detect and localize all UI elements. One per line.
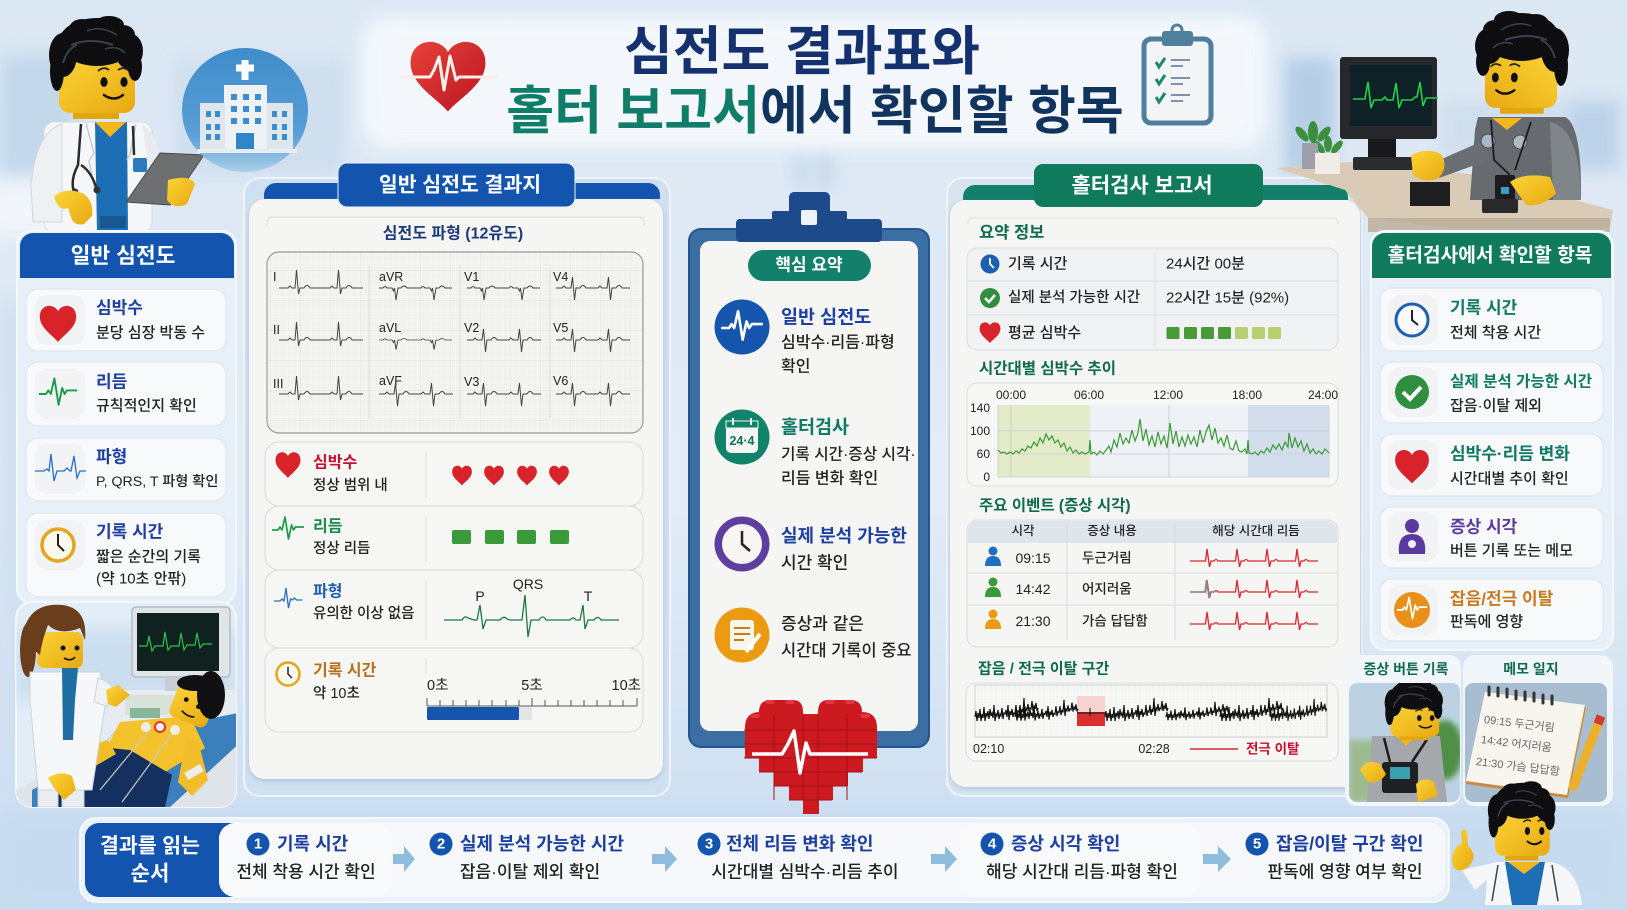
strip heading: order of reading results: 순서 <box>131 862 169 886</box>
heading: key events: 주요 이벤트 (증상 시각) <box>979 496 1131 514</box>
table: key events: 해당 시간대 리듬 <box>1212 524 1300 538</box>
panel: key summary clipboard <box>689 192 929 747</box>
card: symptom time: 버튼 기록 또는 메모 <box>1450 542 1573 560</box>
card: recording time <box>26 513 226 597</box>
row: recording time ruler: 0초 <box>427 678 448 694</box>
step 4: 증상 시각 확인 <box>1011 834 1120 854</box>
panel heading: items to check in holter: 홀터검사에서 확인할 항목 <box>1388 244 1592 266</box>
event row: 09:15 palpitation: 09:15 <box>1015 550 1051 566</box>
illustration: memo notebook with pencil: 14:42 어지러움 <box>1480 733 1552 755</box>
icon: hospital in blue circle <box>182 48 308 172</box>
step 1: 기록 시간 <box>277 834 349 854</box>
illustration: memo notebook with pencil: 21:30 가슴 답답함 <box>1475 755 1560 778</box>
tab heading: general ECG result sheet <box>338 163 575 207</box>
step 5: 판독에 영향 여부 확인 <box>1268 862 1422 882</box>
row: heart rate normal: 정상 범위 내 <box>313 477 388 494</box>
table: summary info: 실제 분석 가능한 시간 <box>1008 289 1140 306</box>
illustration: nurse, monitor and patient with electrodes <box>16 602 243 807</box>
summary item: holter test: 홀터검사 <box>781 416 849 438</box>
chart: hourly heart rate line: 00:00 <box>996 388 1026 402</box>
card: waveform: P, QRS, T 파형 확인 <box>96 474 218 490</box>
chart: noise strip: 02:10 <box>973 742 1004 756</box>
row: rhythm normal: 정상 리듬 <box>313 540 370 557</box>
step 2: 2 <box>437 836 445 852</box>
step 2 <box>430 832 624 882</box>
table: summary info <box>967 248 1338 350</box>
chart: hourly heart rate line: 18:00 <box>1232 388 1262 402</box>
tab heading: holter report: 홀터검사 보고서 <box>1071 174 1213 198</box>
chart: hourly heart rate line <box>967 383 1338 486</box>
chart: hourly heart rate line: 12:00 <box>1153 388 1183 402</box>
panel heading: items to check in holter <box>1372 233 1611 278</box>
event row: 14:42 dizziness <box>985 578 1318 598</box>
row: recording time ruler <box>265 648 643 732</box>
step 2: 실제 분석 가능한 시간 <box>460 834 624 854</box>
table: summary info: 24시간 00분 <box>1166 256 1245 272</box>
card: symptom time <box>1380 507 1603 568</box>
row: heart rate normal: 심박수 <box>313 454 357 472</box>
card: noise and lead-off: 잡음/전극 이탈 <box>1450 590 1554 608</box>
strip heading: order of reading results: 결과를 읽는 <box>100 834 200 858</box>
summary item: holter test <box>714 410 916 488</box>
icon: heart with ECG line <box>400 42 497 111</box>
panel: symptom button and memo diary <box>1345 655 1613 806</box>
summary item: same-time record: 증상과 같은 <box>781 614 864 634</box>
illustration: memo notebook with pencil: 09:15 두근거림 <box>1483 713 1555 735</box>
chart: 12-lead ECG traces: II <box>273 323 280 337</box>
chart: 12-lead ECG traces: V6 <box>553 374 568 388</box>
chart: 12-lead ECG traces: aVR <box>379 270 403 284</box>
chart: hourly heart rate line: 24:00 <box>1308 388 1338 402</box>
summary item: analyzable time: 실제 분석 가능한 <box>781 526 907 546</box>
summary item: holter test: 기록 시간·증상 시각· <box>781 446 916 464</box>
row: waveform with P QRS T: 유의한 이상 없음 <box>313 605 414 622</box>
card: waveform: 파형 <box>96 448 127 466</box>
tab heading: holter report <box>1034 164 1263 207</box>
card: noise and lead-off: 판독에 영향 <box>1450 614 1523 630</box>
event row: 14:42 dizziness: 어지러움 <box>1082 582 1132 596</box>
chart: 12-lead ECG traces: aVF <box>379 374 402 388</box>
step 1: 전체 착용 시간 확인 <box>236 862 376 882</box>
row: waveform with P QRS T: QRS <box>513 576 543 592</box>
chart: 12-lead ECG traces: V1 <box>464 270 479 284</box>
reading order strip <box>80 818 1449 902</box>
step 5: 잡음/이탈 구간 확인 <box>1276 834 1423 854</box>
summary item: holter test: 24·4 <box>729 434 755 448</box>
heading: summary info: 요약 정보 <box>979 223 1044 242</box>
chart: 12-lead ECG traces: V3 <box>464 375 479 389</box>
step 4 <box>960 823 1199 897</box>
step 1 <box>219 823 391 897</box>
title panel <box>362 16 1267 148</box>
panel: general ECG result sheet <box>244 163 670 796</box>
pill heading: key summary: 핵심 요약 <box>775 256 843 274</box>
summary item: general ECG: 일반 심전도 <box>781 306 871 328</box>
row: recording time ruler: 기록 시간 <box>313 662 377 680</box>
card: analyzable time <box>1380 362 1603 423</box>
event row: 09:15 palpitation <box>985 546 1318 567</box>
card: symptom time: 증상 시각 <box>1450 518 1518 536</box>
panel heading: general ECG: 일반 심전도 <box>71 244 175 268</box>
card: recording time: 기록 시간 <box>96 522 164 542</box>
pill heading: key summary <box>748 250 871 281</box>
chart: 12-lead ECG traces: V2 <box>464 321 479 335</box>
lego doctor top-left with tablet <box>31 16 204 232</box>
illustration: lego man with holter device <box>1349 679 1463 802</box>
step 3: 시간대별 심박수·리듬 추이 <box>711 862 899 882</box>
step 3: 3 <box>705 836 713 852</box>
row: waveform with P QRS T <box>265 570 643 648</box>
summary item: general ECG: 심박수·리듬·파형 <box>781 334 895 352</box>
arrow 2 <box>652 846 677 872</box>
chart: 12-lead ECG traces: V4 <box>553 270 568 284</box>
lego doctor bottom-right pointing up <box>1452 781 1582 905</box>
title text <box>506 22 1124 141</box>
step 2: 잡음·이탈 제외 확인 <box>460 862 600 882</box>
step 5 <box>1246 832 1423 882</box>
event row: 21:30 chest tightness: 가슴 답답함 <box>1082 614 1148 628</box>
row: waveform with P QRS T: P <box>475 588 485 604</box>
row: recording time ruler: 5초 <box>521 678 543 694</box>
summary item: general ECG: 확인 <box>781 358 810 376</box>
chart: 12-lead ECG traces <box>267 252 643 433</box>
card: waveform <box>26 438 226 501</box>
table: summary info: 기록 시간 <box>1008 256 1068 272</box>
summary item: general ECG <box>714 300 895 376</box>
strip heading: order of reading results <box>85 823 245 897</box>
card: recording time: 짧은 순간의 기록 <box>96 548 201 566</box>
summary item: holter test: 리듬 변화 확인 <box>781 470 878 488</box>
chart: hourly heart rate line: 60 <box>977 447 990 461</box>
heading: hourly heart rate trend: 시간대별 심박수 추이 <box>979 360 1116 378</box>
card: heart rate: 분당 심장 박동 수 <box>96 324 205 342</box>
heading: noise and lead-off interval: 잡음 / 전극 이탈 구간 <box>978 660 1109 678</box>
table: summary info: 22시간 15분 (92%) <box>1166 290 1289 306</box>
row: heart rate normal <box>265 442 643 506</box>
card: noise and lead-off <box>1380 579 1603 641</box>
summary item: same-time record <box>714 608 912 662</box>
summary item: analyzable time: 시간 확인 <box>781 554 848 572</box>
card: analyzable time: 잡음·이탈 제외 <box>1450 398 1542 414</box>
chart: hourly heart rate line: 06:00 <box>1074 388 1104 402</box>
card: recording time <box>1380 288 1603 351</box>
clipboard clip <box>736 192 882 242</box>
chart: hourly heart rate line: 100 <box>970 424 990 438</box>
chart: 12-lead ECG traces: aVL <box>379 321 401 335</box>
card: recording time: (약 10초 안팎) <box>96 570 186 588</box>
label: symptom button record: 증상 버튼 기록 <box>1363 661 1449 677</box>
title text: 심전도 결과표와 <box>624 22 980 82</box>
icon: lego brick heart <box>744 700 877 814</box>
icon: clipboard checklist <box>1144 25 1211 123</box>
chart: hourly heart rate line: 0 <box>983 470 990 484</box>
chart: 12-lead ECG traces: I <box>273 270 276 284</box>
event row: 21:30 chest tightness: 21:30 <box>1015 613 1051 629</box>
table: key events <box>967 520 1338 647</box>
row: rhythm normal <box>265 506 643 570</box>
arrow 3 <box>931 846 957 872</box>
lego technician at desk with monitor <box>1276 11 1613 232</box>
card: recording time: 전체 착용 시간 <box>1450 324 1541 342</box>
table: key events: 증상 내용 <box>1087 524 1137 538</box>
card: heart rate and rhythm change: 심박수·리듬 변화 <box>1450 444 1570 464</box>
card: recording time: 기록 시간 <box>1450 298 1518 318</box>
step 5: 5 <box>1253 836 1261 852</box>
event row: 21:30 chest tightness <box>985 610 1318 630</box>
row: waveform with P QRS T: 파형 <box>313 582 342 600</box>
step 4: 4 <box>988 836 997 852</box>
summary item: analyzable time <box>714 516 907 572</box>
chart: 12-lead ECG traces: III <box>273 377 283 391</box>
table: key events: 시각 <box>1011 524 1035 538</box>
chart: hourly heart rate line: 140 <box>970 401 990 415</box>
panel heading: general ECG <box>20 233 234 278</box>
card: heart rate and rhythm change <box>1380 434 1603 496</box>
panel: general ECG items <box>17 231 236 603</box>
panel: holter report <box>947 164 1362 796</box>
label: memo diary: 메모 일지 <box>1503 661 1559 677</box>
summary item: same-time record: 시간대 기록이 중요 <box>781 641 912 660</box>
chart: noise strip: 02:28 <box>1138 742 1170 756</box>
tab heading: general ECG result sheet: 일반 심전도 결과지 <box>379 174 541 196</box>
card: heart rate: 심박수 <box>96 298 143 318</box>
row: rhythm normal: 리듬 <box>313 518 343 536</box>
chart: noise strip <box>966 683 1338 761</box>
row: recording time ruler: 약 10초 <box>313 685 360 702</box>
card: heart rate <box>26 289 226 351</box>
event row: 14:42 dizziness: 14:42 <box>1015 581 1051 597</box>
step 1: 1 <box>254 836 262 852</box>
row: recording time ruler: 10초 <box>612 678 641 694</box>
row: waveform with P QRS T: T <box>584 588 593 604</box>
panel: items to check in holter <box>1371 231 1613 650</box>
chart: 12-lead ECG traces: V5 <box>553 321 568 335</box>
arrow 1 <box>393 846 415 872</box>
chart: noise strip: 전극 이탈 <box>1246 742 1300 756</box>
step 3: 전체 리듬 변화 확인 <box>726 834 873 854</box>
title text: 홀터 보고서에서 확인할 항목 <box>506 83 1124 141</box>
step 4: 해당 시간대 리듬·파형 확인 <box>986 862 1178 882</box>
card: analyzable time: 실제 분석 가능한 시간 <box>1450 372 1592 390</box>
step 3 <box>698 832 899 882</box>
card: heart rate and rhythm change: 시간대별 추이 확인 <box>1450 470 1569 488</box>
card: rhythm: 규칙적인지 확인 <box>96 398 197 414</box>
heading: ECG waveform 12-lead: 심전도 파형 (12유도) <box>383 224 523 242</box>
arrow 4 <box>1203 846 1231 872</box>
illustration: memo notebook with pencil <box>1465 683 1607 802</box>
card: rhythm: 리듬 <box>96 372 127 392</box>
table: summary info: 평균 심박수 <box>1008 324 1081 342</box>
card: rhythm <box>26 362 226 426</box>
event row: 09:15 palpitation: 두근거림 <box>1082 550 1132 566</box>
